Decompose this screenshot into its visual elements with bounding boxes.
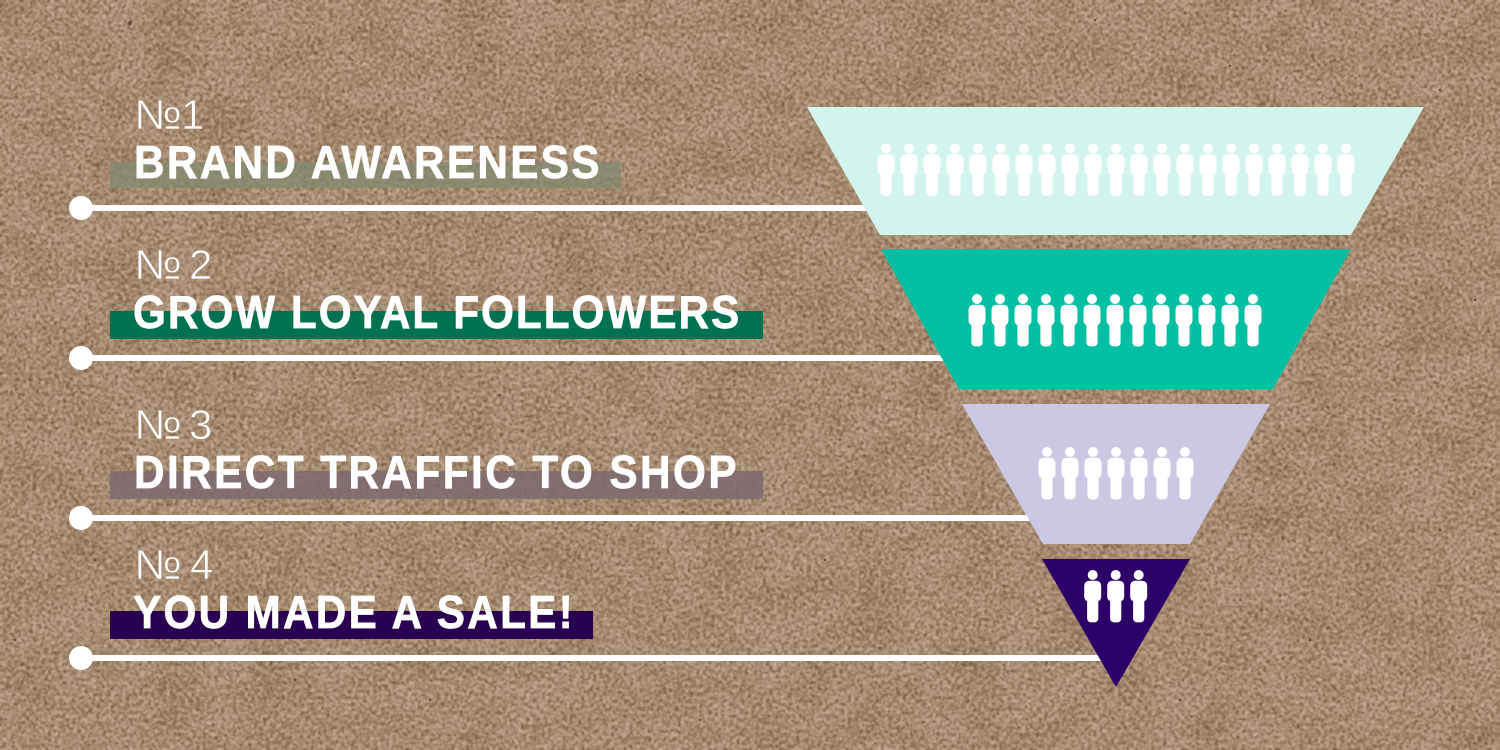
- connector line 2: [69, 346, 961, 370]
- step 2 label: [110, 241, 763, 339]
- number 4: №: [134, 541, 182, 588]
- people row: 7 icons: [1038, 447, 1194, 499]
- people row: 13 icons: [968, 294, 1262, 346]
- number 4: [134, 541, 213, 588]
- heading 3: DIRECT TRAFFIC TO SHOP: [134, 447, 737, 498]
- number 3: [134, 401, 212, 448]
- number 3: 3: [189, 401, 212, 448]
- funnel tier 2: [881, 249, 1351, 389]
- number 2: [134, 241, 212, 288]
- step 4 label: [110, 541, 593, 639]
- number 1: №: [134, 91, 182, 138]
- number 2: 2: [189, 241, 212, 288]
- connector line 1: [69, 196, 881, 220]
- heading 2: GROW LOYAL FOLLOWERS: [133, 287, 739, 338]
- number 2: №: [134, 241, 182, 288]
- connector line 4: [69, 646, 1111, 670]
- highlight bar 3: [110, 471, 763, 499]
- connector line 3: [69, 506, 1041, 530]
- number 4: 4: [190, 541, 213, 588]
- heading 4: YOU MADE A SALE!: [133, 587, 573, 638]
- number 3: №: [134, 401, 182, 448]
- funnel tier 1: [807, 107, 1424, 235]
- step 1 label: [110, 91, 621, 188]
- people row: 3 icons: [1084, 570, 1147, 622]
- number 1: [134, 91, 204, 138]
- highlight bar 4: [110, 611, 593, 639]
- step 3 label: [110, 401, 763, 499]
- funnel tier 3: [962, 404, 1270, 544]
- people row: 21 icons: [878, 144, 1354, 196]
- funnel tier 4: [1042, 559, 1190, 687]
- highlight bar 2: [110, 311, 763, 339]
- heading 1: BRAND AWARENESS: [134, 137, 600, 188]
- number 1: 1: [181, 91, 204, 138]
- highlight bar 1: [110, 162, 621, 188]
